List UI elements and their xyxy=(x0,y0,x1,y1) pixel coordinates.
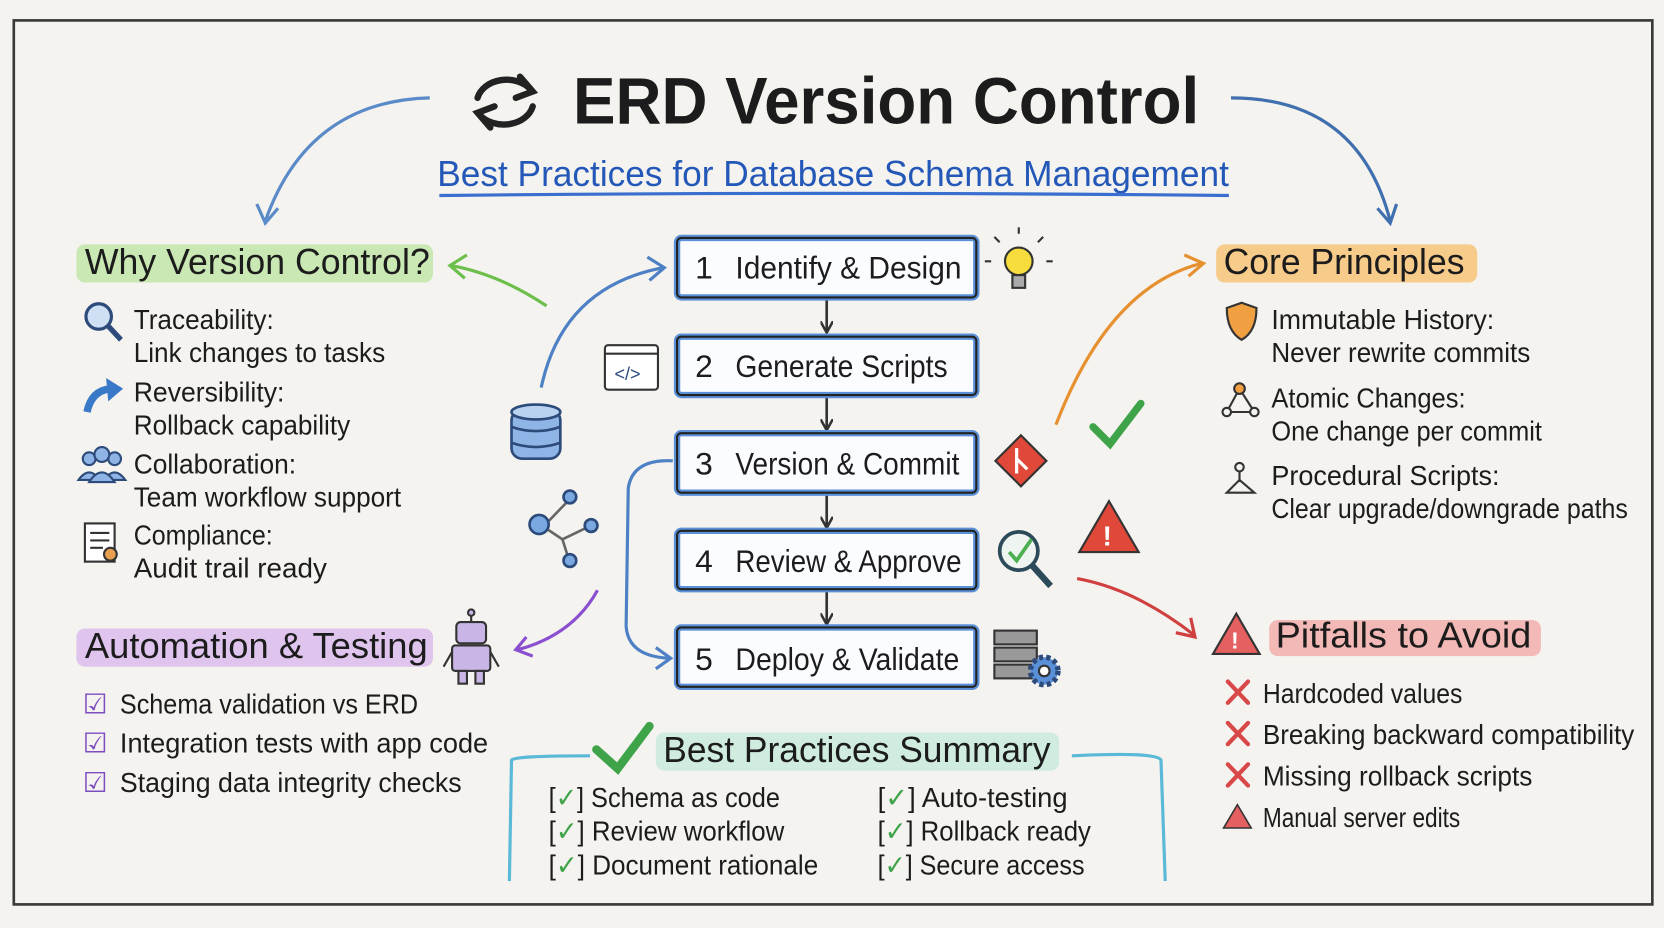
step 4 xyxy=(677,531,976,589)
flow: steps xyxy=(677,238,976,687)
panel: core principles: Atomic Changes: xyxy=(1271,383,1466,414)
panel: core principles xyxy=(1216,241,1628,524)
icon: team xyxy=(79,447,125,482)
arrow: db to step 1 xyxy=(541,257,664,388)
arrow: title to left xyxy=(257,98,430,223)
panel: automation & testing: ☑ xyxy=(83,688,108,719)
panel: automation & testing: ☑ xyxy=(83,767,108,798)
panel: pitfalls to avoid: Pitfalls to Avoid xyxy=(1276,615,1531,656)
panel: automation & testing xyxy=(76,609,499,798)
icon: robot xyxy=(444,609,499,684)
panel: why version control: Traceability: xyxy=(134,304,274,335)
panel: why version control: Compliance: xyxy=(134,520,273,551)
icon: warning triangle: ! xyxy=(1103,521,1112,552)
step 3: 3 xyxy=(695,446,713,482)
icon: atom nodes xyxy=(1223,383,1259,416)
panel: pitfalls to avoid: Manual server edits xyxy=(1263,802,1460,833)
subtitle: Best Practices for Database Schema Management xyxy=(437,153,1229,194)
icon: code window: </> xyxy=(614,364,641,384)
step 2 xyxy=(677,337,976,395)
panel: pitfalls to avoid: Breaking backward compatibility xyxy=(1263,719,1634,750)
panel: why version control xyxy=(76,241,433,584)
icon: procedure xyxy=(1227,463,1254,493)
arrow: red to pitfalls xyxy=(1077,579,1195,637)
icon: magnifier check xyxy=(1000,532,1051,586)
step 3 xyxy=(677,433,976,493)
icon: refresh xyxy=(478,77,533,128)
icon: server gear xyxy=(994,631,1058,685)
panel: why version control: Audit trail ready xyxy=(134,553,327,584)
panel: core principles: Core Principles xyxy=(1224,241,1464,282)
panel: why version control: Reversibility: xyxy=(134,376,284,407)
panel: core principles: Never rewrite commits xyxy=(1271,337,1530,368)
panel: pitfalls to avoid: Hardcoded values xyxy=(1263,678,1462,709)
panel: pitfalls to avoid: ! xyxy=(1231,628,1239,654)
panel: pitfalls to avoid: Missing rollback scripts xyxy=(1263,761,1532,792)
icon: database xyxy=(512,405,560,459)
icon: magnifier xyxy=(86,304,121,340)
panel: why version control: Rollback capability xyxy=(134,409,350,440)
panel: why version control: Collaboration: xyxy=(134,449,296,480)
panel: core principles: Immutable History: xyxy=(1271,304,1494,335)
panel: why version control: Why Version Control? xyxy=(85,241,430,282)
step 5 xyxy=(677,627,976,687)
panel: best practices summary: [✓] Review workflow xyxy=(549,816,784,847)
panel: best practices summary: [✓] Schema as code xyxy=(549,782,780,813)
panel: best practices summary: Best Practices Summary xyxy=(663,729,1051,770)
step 2: Generate Scripts xyxy=(735,348,948,384)
panel: best practices summary: [✓] Auto-testing xyxy=(878,782,1068,813)
arrow: title to right xyxy=(1231,98,1397,223)
step 1 xyxy=(677,238,976,297)
icon: git diamond xyxy=(995,435,1046,486)
step 3: Version & Commit xyxy=(735,446,959,482)
panel: why version control: Link changes to tasks xyxy=(134,337,385,368)
step 2: 2 xyxy=(695,348,713,384)
step 4: 4 xyxy=(695,543,713,579)
step 5: 5 xyxy=(695,641,713,677)
icon: bulb xyxy=(985,227,1053,288)
icon: green check xyxy=(1093,404,1141,444)
icon: code window xyxy=(605,345,658,390)
panel: best practices summary: [✓] Secure access xyxy=(878,850,1085,881)
icon: redo arrow xyxy=(87,378,123,412)
panel: automation & testing: Integration tests with app code xyxy=(120,728,488,759)
panel: why version control: Team workflow support xyxy=(134,481,401,512)
panel: best practices summary xyxy=(509,726,1165,881)
panel: core principles: Procedural Scripts: xyxy=(1271,460,1500,491)
icon: big check xyxy=(596,726,649,769)
panel: automation & testing: ☑ xyxy=(83,728,108,759)
panel: automation & testing: Staging data integrity checks xyxy=(120,767,462,798)
arrow: purple to automation xyxy=(516,590,597,656)
step 4: Review & Approve xyxy=(735,543,961,579)
step 1: Identify & Design xyxy=(735,249,961,285)
panel: core principles: Clear upgrade/downgrade paths xyxy=(1271,493,1628,524)
panel: automation & testing: Schema validation vs ERD xyxy=(120,688,418,719)
panel: automation & testing: Automation & Testing xyxy=(85,625,428,666)
panel: best practices summary: [✓] Rollback ready xyxy=(878,816,1091,847)
title: ERD Version Control xyxy=(573,63,1199,137)
panel: best practices summary: [✓] Document rationale xyxy=(549,850,818,881)
icon: warning triangle xyxy=(1079,501,1139,552)
icon: document xyxy=(85,523,117,562)
arrow: green to why xyxy=(450,255,547,306)
step 5: Deploy & Validate xyxy=(735,641,959,677)
panel: core principles: One change per commit xyxy=(1271,416,1542,447)
panel: pitfalls to avoid xyxy=(1213,614,1634,833)
arrow: loop step 3 to step 5 xyxy=(626,461,673,669)
icon: network xyxy=(530,491,597,567)
icon: shield xyxy=(1227,303,1256,340)
arrow: orange to core xyxy=(1056,255,1203,425)
step 1: 1 xyxy=(695,249,713,285)
